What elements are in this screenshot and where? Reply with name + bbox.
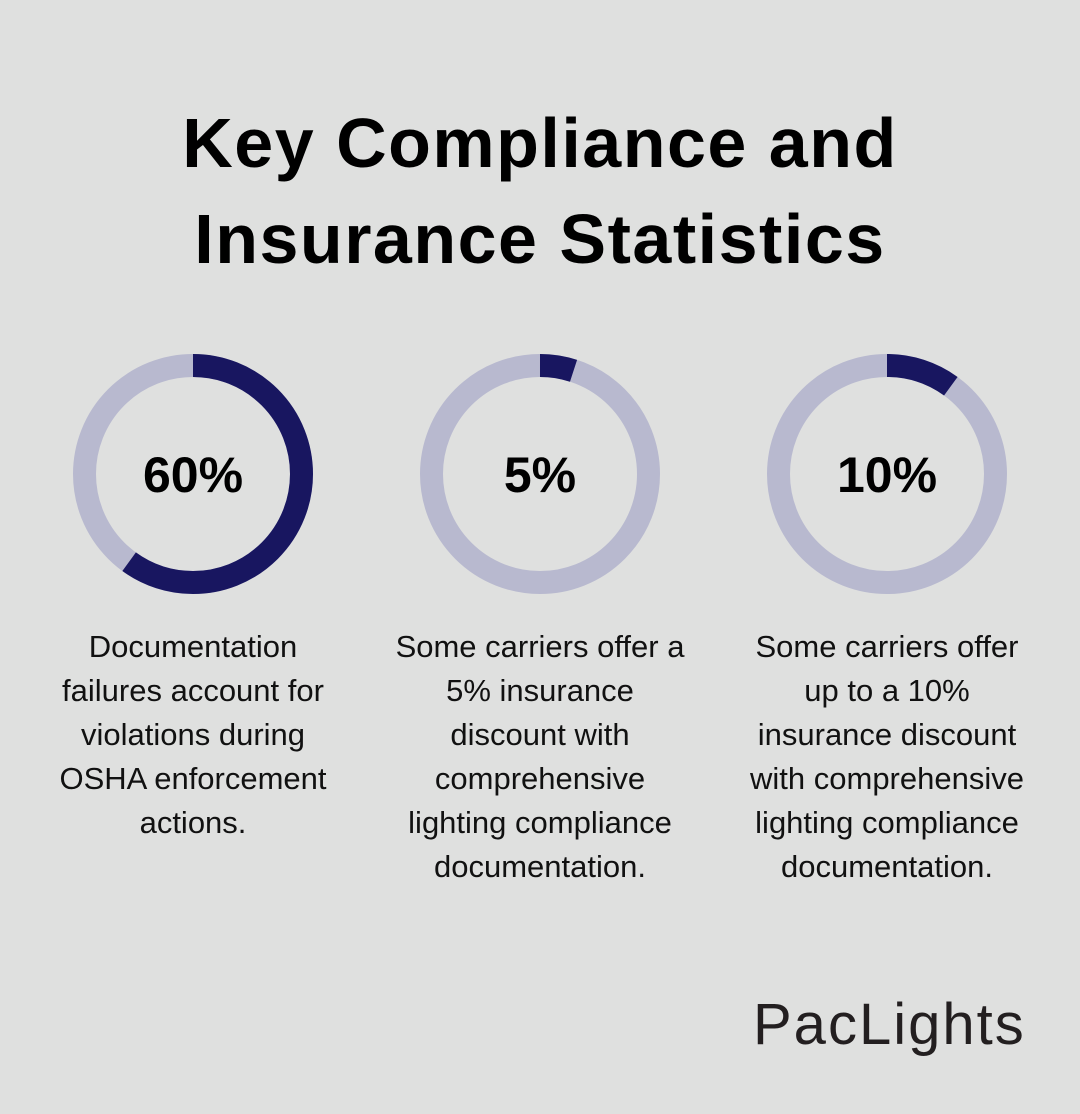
donut: 10% (767, 354, 1007, 594)
title (182, 104, 898, 278)
title: Key Compliance and (182, 104, 898, 182)
text: 5% description (396, 629, 684, 884)
text: 5% description: comprehensive (435, 761, 645, 796)
text: 60% description: Documentation (89, 629, 297, 664)
text: 10% description: up to a 10% (804, 673, 970, 708)
donut: 60% (73, 354, 313, 594)
donut: 5%: 5% (504, 447, 576, 503)
text: 5% description: 5% insurance (446, 673, 634, 708)
text: 10% description: insurance discount (758, 717, 1016, 752)
text: 60% description: actions. (140, 805, 246, 840)
logo: PacLights (753, 992, 1026, 1057)
text: 10% description: with comprehensive (750, 761, 1024, 796)
text: 5% description: documentation. (434, 849, 646, 884)
donut: 5% (420, 354, 660, 594)
donut: 60%: 60% (143, 447, 243, 503)
text: 5% description: lighting compliance (408, 805, 672, 840)
text: 10% description (750, 629, 1024, 884)
text: 10% description: documentation. (781, 849, 993, 884)
text: 60% description: OSHA enforcement (59, 761, 327, 796)
text: 60% description (59, 629, 327, 840)
text: 10% description: Some carriers offer (755, 629, 1018, 664)
text: 60% description: violations during (81, 717, 305, 752)
donut: 10%: 10% (837, 447, 937, 503)
text: 5% description: discount with (450, 717, 630, 752)
title: Insurance Statistics (194, 200, 886, 278)
text: 60% description: failures account for (62, 673, 324, 708)
text: 5% description: Some carriers offer a (396, 629, 684, 664)
text: 10% description: lighting compliance (755, 805, 1019, 840)
